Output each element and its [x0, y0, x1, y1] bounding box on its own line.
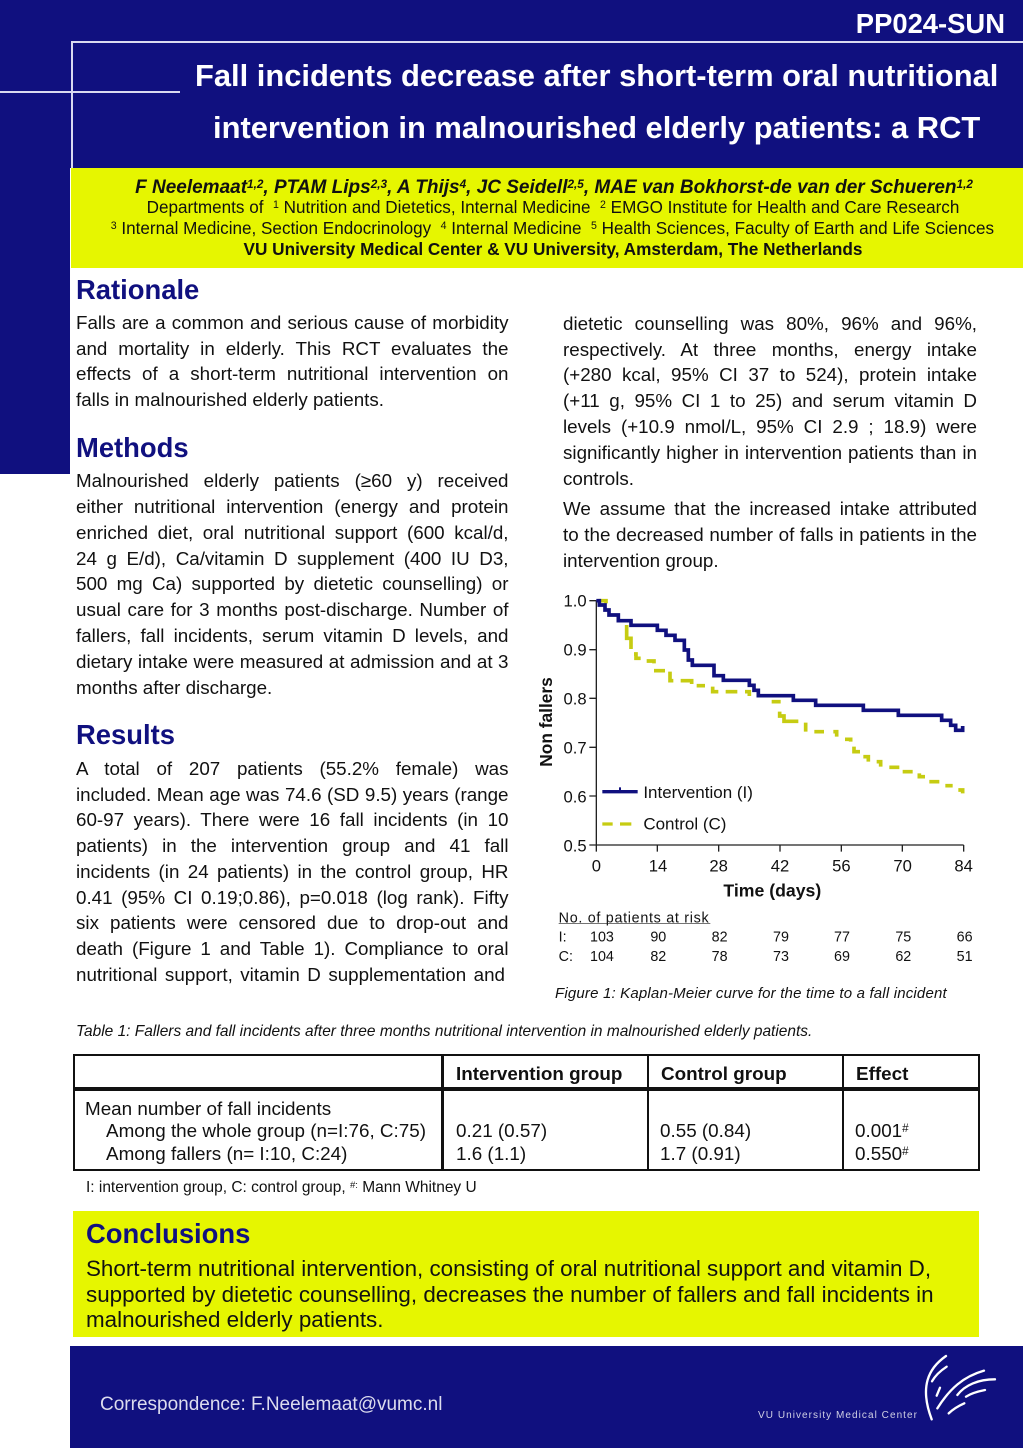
authors and affiliations	[111, 177, 994, 259]
text: rationale: falls in malnourished elderly patients.	[76, 389, 384, 410]
patients at risk table: 73	[773, 949, 789, 965]
effect values	[855, 1120, 909, 1164]
control values: 1.7 (0.91)	[660, 1143, 741, 1164]
text: results continued	[563, 313, 977, 489]
patients at risk table: 79	[773, 930, 789, 946]
row labels: Among fallers (n= I:10, C:24)	[106, 1143, 347, 1164]
text: results: death (Figure 1 and Table 1). Compliance to oral	[76, 938, 508, 959]
heading: rationale: Rationale	[76, 274, 199, 305]
patients at risk table: 77	[834, 930, 850, 946]
authors band	[71, 168, 1023, 268]
table header: Control group	[661, 1063, 787, 1084]
chart: Kaplan-Meier curve	[536, 592, 973, 1002]
text: methods: fallers, fall incidents, serum vitamin D levels, and	[76, 625, 508, 646]
icon: VUmc logo	[924, 1354, 996, 1420]
left navy strip	[0, 168, 70, 474]
y axis labels: 0.8	[564, 690, 587, 709]
patients at risk table: 51	[957, 949, 973, 965]
text: methods: 24 g E/d), Ca/vitamin D supplement (400 IU D3,	[76, 548, 508, 569]
patients at risk table: I:	[559, 930, 567, 946]
heading: methods: Methods	[76, 432, 189, 463]
text: assumption: intervention group.	[563, 550, 719, 571]
text: rationale: effects of a short-term nutritional intervention on	[76, 363, 508, 384]
x axis title: Time (days)	[723, 881, 821, 901]
patients at risk table: C:	[559, 949, 573, 965]
text: conclusions: Short-term nutritional intervention, consisting of oral nutritional support and vitamin D,	[86, 1256, 931, 1281]
text: methods: dietary intake were measured at admission and at 3	[76, 651, 508, 672]
heading: conclusions: Conclusions	[86, 1218, 250, 1249]
table header	[456, 1063, 908, 1084]
legend	[602, 783, 753, 834]
logo text: VU University Medical Center	[758, 1410, 918, 1421]
control values: 0.55 (0.84)	[660, 1120, 751, 1141]
text: methods: Malnourished elderly patients (≥60 y) received	[76, 470, 508, 491]
correspondence: Correspondence: F.Neelemaat@vumc.nl	[100, 1394, 442, 1415]
authors: F Neelemaat1,2, PTAM Lips2,3, A Thijs4, JC Seidell2,5, MAE van Bokhorst-de van der Schueren1,2	[135, 177, 973, 198]
text: results continued: (+11 g, 95% CI 1 to 25) and serum vitamin D	[563, 390, 977, 411]
x axis labels: 0	[592, 856, 601, 875]
x axis labels: 14	[649, 856, 667, 875]
table footnote: I: intervention group, C: control group, #: Mann Whitney U	[86, 1179, 477, 1196]
text: conclusions: supported by dietetic counselling, decreases the number of fallers and fall incidents in	[86, 1282, 934, 1307]
patients at risk table: 82	[712, 930, 728, 946]
x axis labels	[592, 856, 973, 875]
text: assumption: to the decreased number of falls in patients in the	[563, 524, 977, 545]
patients at risk table	[559, 910, 973, 965]
x axis labels: 56	[832, 856, 851, 875]
x axis labels: 70	[893, 856, 912, 875]
patients at risk table: 75	[895, 930, 911, 946]
text: results continued: levels (+10.9 nmol/L, 95% CI 2.9 ; 18.9) were	[563, 416, 977, 437]
patients at risk table: 104	[590, 949, 614, 965]
legend: Control (C)	[643, 815, 726, 834]
text: assumption: We assume that the increased intake attributed	[563, 498, 977, 519]
patients at risk table: 78	[712, 949, 728, 965]
patients at risk table: 66	[957, 930, 973, 946]
title: intervention in malnourished elderly patients: a RCT	[213, 110, 980, 145]
text: results	[76, 758, 508, 985]
intervention values: 1.6 (1.1)	[456, 1143, 526, 1164]
y axis labels	[564, 592, 587, 855]
text: conclusions	[86, 1256, 934, 1332]
row labels: Among the whole group (n=I:76, C:75)	[106, 1120, 426, 1141]
header rule lines	[0, 41, 1023, 168]
patients at risk table: No. of patients at risk	[559, 910, 709, 926]
text: rationale: Falls are a common and serious cause of morbidity	[76, 312, 508, 333]
y axis labels: 0.5	[564, 836, 587, 855]
table	[73, 1054, 980, 1171]
table header: Intervention group	[456, 1063, 622, 1084]
text: results continued: respectively. At three months, energy intake	[563, 339, 977, 360]
text: methods: either nutritional intervention (energy and protein	[76, 496, 508, 517]
text: results: included. Mean age was 74.6 (SD 9.5) years (range	[76, 784, 508, 805]
text: results continued: dietetic counselling was 80%, 96% and 96%,	[563, 313, 977, 334]
text: results: six patients were censored due to drop-out and	[76, 912, 508, 933]
text: rationale: and mortality in elderly. This RCT evaluates the	[76, 338, 508, 359]
text: results: nutritional support, vitamin D supplementation and	[76, 964, 505, 985]
text: rationale	[76, 312, 508, 410]
figure caption: Figure 1: Kaplan-Meier curve for the time to a fall incident	[555, 985, 947, 1002]
text: results: 0.41 (95% CI 0.19;0.86), p=0.018 (log rank). Fifty	[76, 887, 508, 908]
text: methods: 500 mg Ca) supported by dietetic counselling) or	[76, 573, 508, 594]
y axis labels: 0.7	[564, 739, 587, 758]
poster code: PP024-SUN	[856, 8, 1005, 39]
intervention curve	[596, 601, 963, 730]
patients at risk table: 90	[650, 930, 666, 946]
y axis title: Non fallers	[536, 677, 556, 767]
x axis labels: 28	[709, 856, 728, 875]
footer band	[70, 1346, 1023, 1448]
row labels: Mean number of fall incidents	[85, 1098, 331, 1119]
title: Fall incidents decrease after short-term oral nutritional	[195, 58, 998, 93]
effect values: 0.001#	[855, 1120, 909, 1141]
text: methods: usual care for 3 months post-discharge. Number of	[76, 599, 508, 620]
control values	[660, 1120, 751, 1164]
text: conclusions: malnourished elderly patients.	[86, 1307, 383, 1332]
patients at risk table: 82	[650, 949, 666, 965]
patients at risk table: 69	[834, 949, 850, 965]
panel: conclusions	[73, 1211, 979, 1337]
text: methods	[76, 470, 508, 698]
effect values: 0.550#	[855, 1143, 909, 1164]
legend: Intervention (I)	[643, 783, 753, 802]
table caption: Table 1: Fallers and fall incidents after three months nutritional intervention in malnourished elderly patients.	[76, 1023, 812, 1040]
row labels	[85, 1098, 426, 1164]
text: results: patients) in the intervention group and 41 fall	[76, 835, 508, 856]
text: results continued: controls.	[563, 468, 634, 489]
affiliations line 1: Departments of 1 Nutrition and Dietetics, Internal Medicine 2 EMGO Institute for Health and Care Research	[147, 198, 959, 217]
control curve	[598, 601, 963, 793]
header band	[0, 0, 1023, 168]
text: results continued: significantly higher in intervention patients than in	[563, 442, 977, 463]
heading: results: Results	[76, 719, 175, 750]
intervention values	[456, 1120, 547, 1164]
x axis labels: 42	[771, 856, 789, 875]
text: results: incidents (in 24 patients) in the control group, HR	[76, 861, 508, 882]
text: assumption	[563, 498, 977, 571]
text: methods: enriched diet, oral nutritional support (600 kcal/d,	[76, 522, 508, 543]
y axis labels: 0.9	[564, 641, 587, 660]
patients at risk table: 62	[895, 949, 911, 965]
patients at risk table: 103	[590, 930, 614, 946]
x axis labels: 84	[954, 856, 973, 875]
text: methods: months after discharge.	[76, 677, 272, 698]
axes	[589, 601, 964, 852]
affiliations line 2: 3 Internal Medicine, Section Endocrinology 4 Internal Medicine 5 Health Sciences, Faculty of Earth and Life Sciences	[111, 219, 994, 238]
text: results continued: (+280 kcal, 95% CI 37 to 524), protein intake	[563, 364, 977, 385]
y axis labels: 1.0	[564, 592, 587, 611]
title	[195, 58, 998, 145]
table lines	[73, 1054, 980, 1171]
text: results: A total of 207 patients (55.2% female) was	[76, 758, 508, 779]
intervention values: 0.21 (0.57)	[456, 1120, 547, 1141]
table header: Effect	[856, 1063, 908, 1084]
text: results: 60-97 years). There were 16 fall incidents (in 10	[76, 809, 508, 830]
y axis labels: 0.6	[564, 787, 587, 806]
institution: VU University Medical Center & VU University, Amsterdam, The Netherlands	[244, 239, 862, 259]
